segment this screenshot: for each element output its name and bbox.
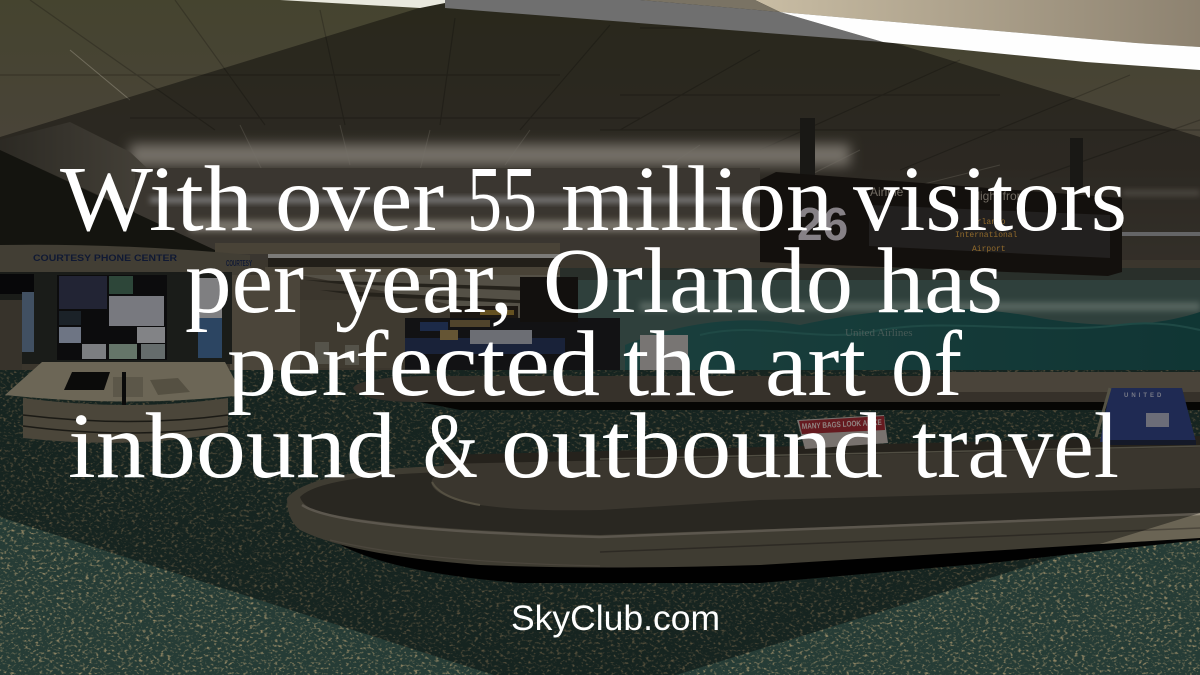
headline line 4: & [423, 395, 478, 498]
headline [60, 148, 1127, 498]
headline line 4: inbound [68, 395, 396, 498]
booth pedestal [23, 398, 228, 443]
headline line 4: outbound [501, 395, 883, 498]
back wall [0, 260, 1200, 385]
headline line 2: year, [335, 230, 513, 333]
headline line 1 [60, 148, 1127, 251]
headline line 1: million [561, 148, 833, 251]
headline line 2: per [185, 230, 304, 333]
hanging sign 26: Airline [870, 185, 904, 199]
booth head band [0, 245, 250, 275]
headline line 4 [68, 395, 1119, 498]
left soffit [0, 150, 215, 262]
headline line 1: 55 [467, 148, 537, 251]
bags warning sign: MANY BAGS LOOK ALIKE [802, 418, 883, 431]
ceiling [0, 0, 1200, 300]
headline line 1: visitors [853, 148, 1127, 251]
corridor ceiling beams [215, 243, 560, 320]
booth ad screens [57, 275, 222, 360]
headline line 1: over [275, 148, 444, 251]
courtesy phone booth [0, 245, 252, 443]
source label: SkyClub.com [511, 598, 720, 638]
headline line 2: Orlando [543, 230, 853, 333]
hanging sign 26: Flight from [970, 189, 1027, 203]
united sign [1096, 388, 1196, 445]
ceiling light fixture, dimmed part [445, 0, 883, 42]
carousel belt [300, 460, 1200, 535]
headline line 3 [227, 313, 962, 416]
booth counter [5, 362, 243, 402]
hanging sign 26: Orlando [972, 218, 1006, 227]
carousel island [431, 445, 1200, 510]
distant baggage carousel [353, 372, 1200, 410]
courtesy phone booth: COURTESY [226, 259, 252, 268]
headline line 3: of [891, 313, 962, 416]
ceiling wedge [0, 122, 232, 248]
courtesy phone booth: COURTESY PHONE CENTER [33, 253, 177, 264]
headline line 3: perfected [227, 313, 600, 416]
teal wall [560, 268, 1200, 385]
united sign: UNITED [1124, 393, 1164, 399]
ceiling light fixture, bright part right [780, 12, 1200, 70]
hanging sign 26: International [955, 231, 1018, 240]
headline line 2 [185, 230, 1003, 333]
ceiling light fixture, bright part left [280, 0, 445, 8]
carousel rim highlight [302, 505, 1200, 537]
headline line 3: art [765, 313, 866, 416]
hanging sign 26 [760, 118, 1122, 276]
ceiling light band [130, 144, 850, 166]
carousel rim [287, 440, 1200, 568]
main baggage carousel [287, 436, 1200, 583]
headline line 3: the [623, 313, 738, 416]
ceiling lower stripes [135, 168, 1200, 260]
carpet floor [0, 370, 1200, 675]
headline line 4: travel [912, 395, 1119, 498]
hanging sign 26: Airport [972, 245, 1006, 254]
booth dark body [0, 272, 232, 364]
hanging sign 26: 26 [797, 198, 848, 250]
headline line 2: has [877, 230, 1003, 333]
distant concourse [230, 275, 688, 385]
tan fixture housing, dimmed part [640, 0, 780, 12]
carousel shadow [320, 510, 1200, 583]
teal wall: United Airlines [845, 327, 913, 339]
bags warning sign [797, 415, 888, 449]
headline line 1: With [60, 148, 253, 251]
tan fixture housing, top right [755, 0, 1200, 47]
